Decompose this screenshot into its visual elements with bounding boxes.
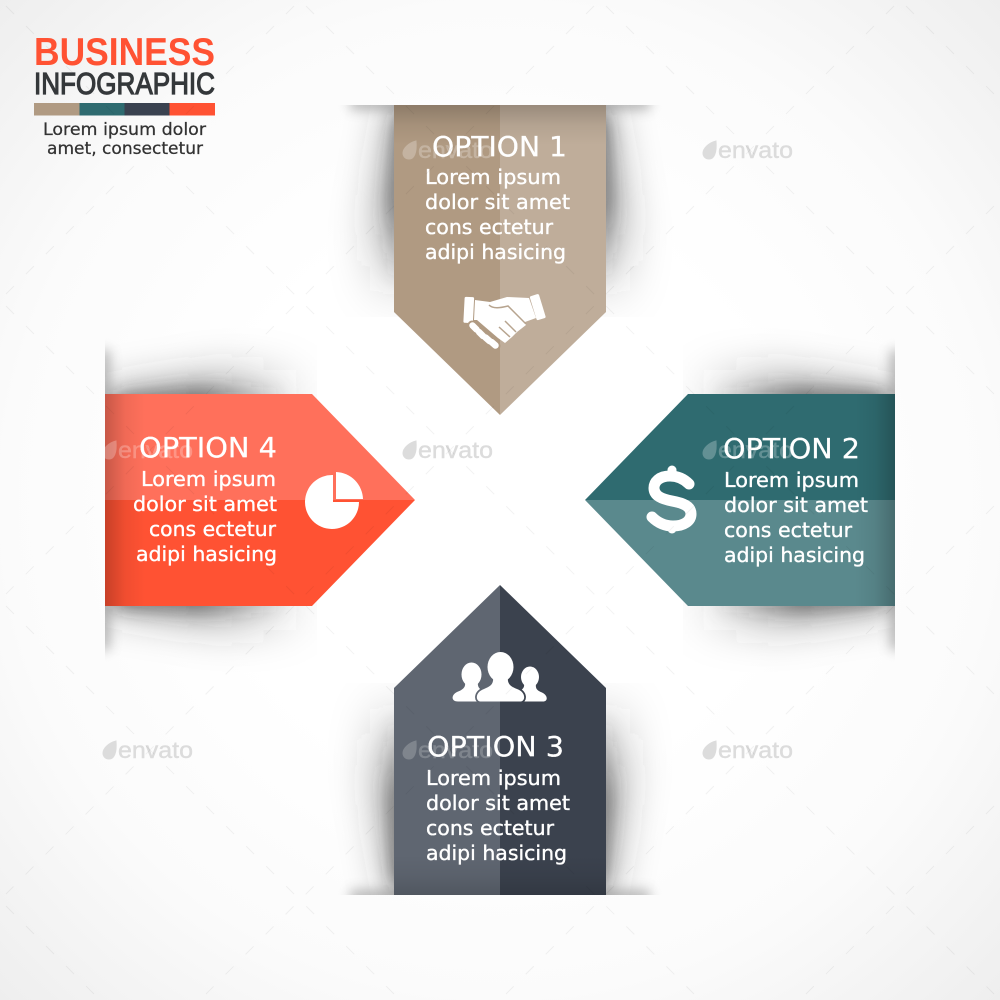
panel: option 1 [394,105,606,415]
heading: OPTION 2 [723,433,860,465]
text block [425,165,570,264]
watermark: envato [418,737,493,763]
icon: people [453,652,547,702]
text block: adipi hasicing [425,240,566,264]
shadow: bottom arrow [350,690,650,904]
panel: option 2 [585,394,895,606]
arrow shape [105,394,415,606]
title block [34,31,215,158]
heading: OPTION 3 [427,731,564,763]
watermark: envato [418,137,493,163]
watermarks on background [103,137,793,763]
subtitle: Lorem ipsum dolor [43,120,206,139]
text block: Lorem ipsum [724,468,859,492]
panel: option 3 [394,585,606,895]
text block: Lorem ipsum [425,165,561,189]
icon: pie chart [305,472,363,529]
text block: dolor sit amet [425,190,570,214]
shadow: right arrow [690,350,904,650]
arrow shape [394,105,606,415]
shadow: left arrow [96,350,310,650]
watermark: envato [718,437,793,463]
panel: option 4 [103,394,415,606]
title: infographic: INFOGRAPHIC [34,66,215,101]
text block: dolor sit amet [724,493,868,517]
text block: cons ectetur [425,215,554,239]
title: business: BUSINESS [34,31,215,74]
shadow: top arrow [350,96,650,310]
text block: cons ectetur [426,816,555,840]
text block: Lorem ipsum [141,467,276,491]
text block: dolor sit amet [133,492,277,516]
text block: dolor sit amet [426,791,570,815]
heading: OPTION 4 [139,432,277,464]
watermarks on background: envato [418,437,493,463]
text block: adipi hasicing [136,542,277,566]
icon: dollar [652,470,691,529]
text block: Lorem ipsum [426,766,561,790]
watermarks on background: envato [718,137,793,163]
subtitle: amet, consectetur [47,139,203,158]
text block: adipi hasicing [724,543,865,567]
text block: adipi hasicing [426,841,567,865]
text block [426,766,570,865]
arrow shape [585,394,895,606]
icon: handshake [463,294,546,346]
heading: OPTION 1 [432,131,567,163]
colour bar [34,103,215,116]
text block: cons ectetur [149,517,277,541]
watermarks on background: envato [718,737,793,763]
text block [133,467,277,566]
watermark: envato [118,437,193,463]
arrow shape [394,585,606,895]
watermarks on background: envato [118,737,193,763]
text block: cons ectetur [724,518,853,542]
text block [724,468,868,567]
